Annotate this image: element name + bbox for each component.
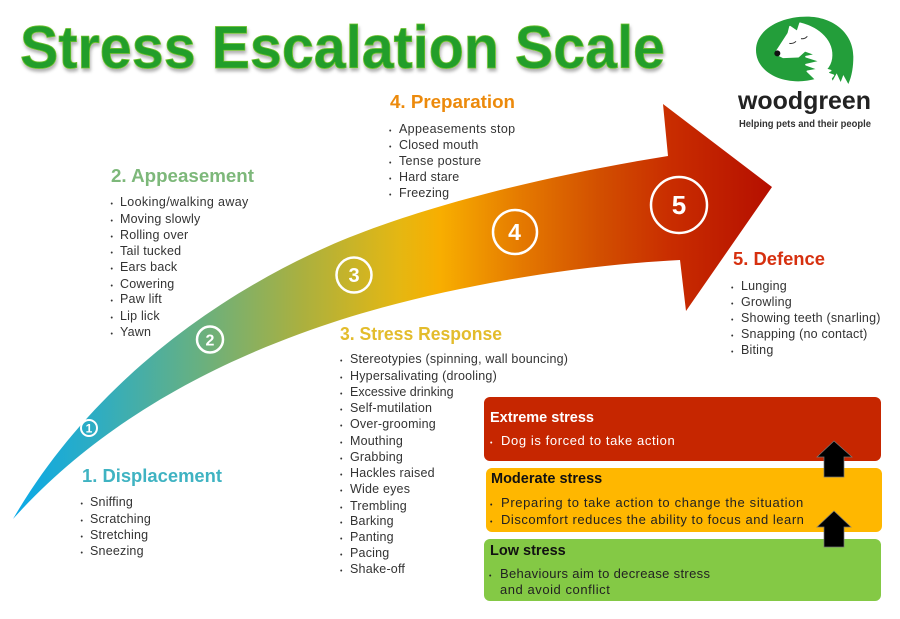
list 2: Rolling over (120, 228, 188, 242)
list 5: Biting (741, 343, 773, 357)
step marker 1: 1 (86, 422, 93, 436)
panel: moderate stress: Moderate stress (491, 471, 602, 487)
list 4: • (389, 144, 392, 151)
list 4: Appeasements stop (399, 122, 515, 136)
step marker 1 (81, 420, 97, 436)
section 2: appeasement (110, 165, 254, 339)
list 3: Grabbing (350, 450, 403, 464)
list 2: • (110, 218, 114, 225)
step marker 5: 5 (672, 190, 686, 220)
panel: low stress: Behaviours aim to decrease stress (500, 566, 710, 581)
panel: low stress (484, 539, 881, 601)
list 1: • (80, 501, 84, 508)
panel: low stress: Low stress (490, 543, 566, 559)
list 2: Looking/walking away (120, 195, 249, 209)
list 3: • (340, 423, 343, 430)
list 3: Over-grooming (350, 417, 436, 431)
list 3: • (340, 407, 343, 414)
list 3: • (340, 568, 343, 575)
list 5: Showing teeth (snarling) (741, 311, 881, 325)
list 3: • (340, 375, 343, 382)
tagline: Helping pets and their people (739, 118, 871, 130)
section 5: defence (731, 248, 884, 357)
step marker 4: 4 (508, 219, 521, 245)
list 3: • (340, 391, 343, 398)
list 3: • (340, 472, 343, 479)
list 3: Excessive drinking (350, 385, 454, 399)
list 2: • (110, 283, 114, 290)
list 2: • (110, 250, 114, 257)
step marker 2: 2 (206, 332, 215, 350)
heading 1: 1. Displacement (82, 465, 222, 486)
list 1: Sniffing (90, 495, 133, 509)
list 2: Tail tucked (120, 244, 181, 258)
list 1: • (80, 534, 84, 541)
title: Stress Escalation Scale (20, 14, 665, 81)
list 3: • (340, 440, 343, 447)
list 2: Ears back (120, 260, 178, 274)
panel: moderate stress: • (490, 519, 493, 526)
arrow: low to moderate (817, 511, 851, 547)
arrow: moderate to extreme (817, 441, 852, 477)
list 5: • (731, 349, 734, 356)
list 3: • (340, 488, 343, 495)
panel: extreme stress (484, 397, 881, 461)
list 2: • (110, 298, 114, 305)
list 2: Cowering (120, 277, 174, 291)
list 5: Growling (741, 295, 792, 309)
list 3: • (340, 505, 343, 512)
icon: dog hugged by green arms (756, 17, 853, 87)
list 5: • (731, 285, 734, 292)
panel: extreme stress: • (490, 440, 493, 447)
panel: moderate stress: Preparing to take action to change the situation (501, 495, 804, 510)
section 1: displacement (80, 465, 222, 558)
list 5: • (731, 317, 734, 324)
list 3: Shake-off (350, 562, 405, 576)
list 4: • (389, 176, 392, 183)
list 3: • (340, 456, 343, 463)
list 5: Snapping (no contact) (741, 327, 868, 341)
list 3: Wide eyes (350, 482, 410, 496)
list 2: • (110, 201, 114, 208)
list 3: Trembling (350, 499, 407, 513)
list 3: Hackles raised (350, 466, 435, 480)
list 2: • (110, 234, 114, 241)
list 3: Pacing (350, 546, 389, 560)
step marker 3: 3 (348, 265, 360, 287)
logo: woodgreen (737, 17, 871, 130)
list 2: Lip lick (120, 309, 160, 323)
panel: low stress: • (489, 573, 492, 580)
list 2: • (110, 315, 114, 322)
list 3: • (340, 520, 343, 527)
heading 2: 2. Appeasement (111, 165, 254, 186)
list 2: • (110, 266, 114, 273)
list 4: • (389, 128, 392, 135)
panel: extreme stress: Extreme stress (490, 410, 594, 426)
heading 5: 5. Defence (733, 248, 825, 269)
list 4: • (389, 160, 392, 167)
wordmark: woodgreen (737, 87, 871, 115)
list 2: Yawn (120, 325, 151, 339)
list 3: • (340, 358, 343, 365)
panel: moderate stress: Discomfort reduces the ability to focus and learn (501, 512, 804, 527)
heading 4: 4. Preparation (390, 91, 515, 112)
main gradient arrow (13, 104, 772, 519)
list 4: Tense posture (399, 154, 481, 168)
list 4: Freezing (399, 186, 449, 200)
list 4: Closed mouth (399, 138, 479, 152)
list 4: Hard stare (399, 170, 459, 184)
section 4: preparation (389, 91, 519, 200)
panel: extreme stress: Dog is forced to take action (501, 433, 675, 448)
list 3: Hypersalivating (drooling) (350, 369, 497, 383)
list 5: • (731, 333, 734, 340)
list 3: Self-mutilation (350, 401, 432, 415)
list 3: • (340, 552, 343, 559)
list 2: • (110, 331, 114, 338)
list 5: Lunging (741, 279, 787, 293)
list 1: • (80, 518, 84, 525)
heading 3: 3. Stress Response (340, 323, 502, 344)
list 1: • (80, 550, 84, 557)
list 1: Stretching (90, 528, 148, 542)
list 1: Scratching (90, 512, 151, 526)
list 3: Panting (350, 530, 394, 544)
list 3: Barking (350, 514, 394, 528)
panel: low stress: and avoid conflict (500, 582, 610, 597)
list 2: Paw lift (120, 292, 162, 306)
list 3: Stereotypies (spinning, wall bouncing) (350, 352, 568, 366)
section 3: stress response (340, 323, 572, 576)
list 1: Sneezing (90, 544, 144, 558)
list 4: • (389, 192, 392, 199)
step marker 5 (651, 177, 707, 233)
list 3: • (340, 536, 343, 543)
panel: moderate stress (486, 468, 882, 532)
list 2: Moving slowly (120, 212, 201, 226)
panel: moderate stress: • (490, 502, 493, 509)
list 5: • (731, 301, 734, 308)
step marker 3 (336, 258, 372, 292)
step marker 4 (493, 210, 537, 254)
step marker 2 (197, 326, 223, 352)
list 3: Mouthing (350, 434, 403, 448)
